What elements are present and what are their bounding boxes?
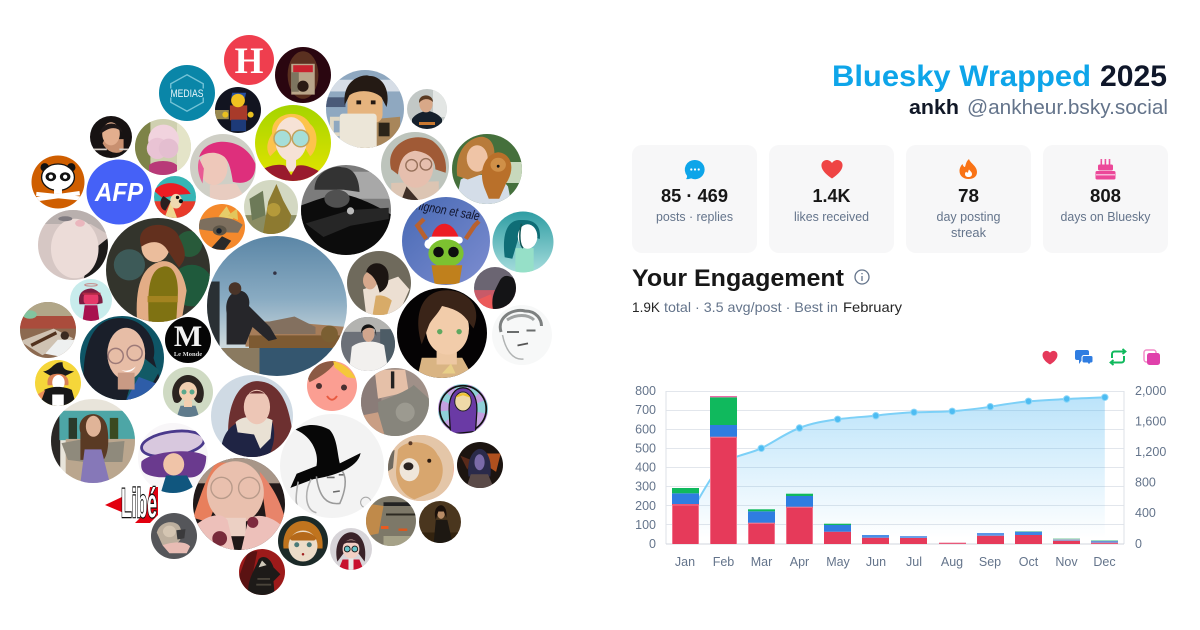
month labels: Mar — [751, 555, 772, 569]
left axis labels: 600 — [635, 422, 656, 436]
avatar: golden dog — [388, 435, 454, 501]
right axis labels: 2,000 — [1135, 384, 1166, 398]
icon: info — [855, 270, 869, 284]
right axis labels: 1,200 — [1135, 445, 1166, 459]
month labels: Jul — [906, 555, 922, 569]
avatar: brown hair illustrated girl — [106, 218, 213, 322]
avatar: orange doll — [278, 516, 328, 566]
stacked bars — [672, 396, 1118, 544]
avatar: teal haired drawing — [492, 212, 554, 276]
avatar: musketeer dog — [154, 176, 196, 218]
engagement summary: total · 3.5 avg/post · Best in — [664, 299, 838, 315]
avatar: Medias logo: MEDIAS — [171, 88, 204, 100]
avatar: lego man with mug — [326, 70, 404, 153]
avatar: library — [20, 302, 76, 358]
avatar: lego figure small — [215, 87, 261, 133]
bar: Nov — [1053, 538, 1080, 544]
grid lines — [666, 391, 1124, 544]
title: Bluesky Wrapped — [832, 60, 1091, 93]
left axis labels: 400 — [635, 460, 656, 474]
avatar: woman dark dress — [419, 501, 461, 543]
panel: avatar bubble cluster: Libé — [121, 480, 157, 526]
engagement summary — [632, 299, 902, 315]
month labels: Apr — [790, 555, 809, 569]
avatar: panda skull logo — [32, 156, 84, 208]
left axis labels: 200 — [635, 499, 656, 513]
right axis labels: 400 — [1135, 506, 1156, 520]
bar: Jun — [862, 535, 889, 544]
bar: Apr — [786, 494, 813, 544]
month labels: May — [826, 555, 851, 569]
bar: Jan — [672, 488, 699, 544]
avatar: pencil sketch boy — [492, 305, 552, 365]
avatar: pink fur woman — [193, 458, 285, 550]
icon: likes legend — [1043, 351, 1057, 364]
avatar: Le Monde logo: Le Monde — [174, 351, 202, 358]
month labels: Feb — [713, 555, 734, 569]
avatar: Le Monde logo: M — [174, 320, 202, 353]
icon: replies legend — [1075, 350, 1093, 365]
bar: May — [824, 524, 851, 544]
bar: Mar — [748, 509, 775, 544]
avatar: winery woman — [51, 399, 135, 483]
month labels: Jun — [866, 555, 886, 569]
avatar: cartoon with green glasses — [163, 367, 213, 417]
avatar: purple hat woman drawing — [138, 423, 208, 493]
value: 808 — [1090, 185, 1121, 206]
icon: reposts legend — [1110, 349, 1126, 365]
avatar: lime cartoon woman — [255, 105, 331, 181]
avatar: H logo — [224, 35, 274, 85]
avatar: pink hair woman — [190, 134, 256, 200]
icon: cake — [1096, 159, 1116, 180]
month labels — [675, 555, 1116, 569]
avatar: smiley cartoon — [307, 361, 357, 411]
chart: monthly engagement — [635, 384, 1166, 569]
avatar: witch pencil drawing — [280, 414, 384, 518]
value: 1.4K — [812, 185, 851, 206]
engagement summary: 1.9K — [632, 299, 661, 315]
avatar: Christmas cactus: mignon et sale — [412, 197, 481, 223]
cumulative line — [685, 394, 1108, 522]
value: 85 · 469 — [661, 185, 728, 206]
month labels: Dec — [1093, 555, 1116, 569]
avatar: dark hair drawing — [90, 116, 132, 158]
month labels: Nov — [1055, 555, 1078, 569]
avatar: Ruby character — [70, 279, 112, 321]
right axis labels: 0 — [1135, 537, 1142, 551]
avatar: cotton candy — [135, 119, 191, 175]
value: 78 — [958, 185, 979, 206]
avatar: Le Monde logo — [165, 317, 211, 363]
right axis labels: 1,600 — [1135, 414, 1166, 428]
month labels: Oct — [1019, 555, 1039, 569]
right axis labels: 800 — [1135, 476, 1156, 490]
avatar: woman updo — [347, 251, 411, 315]
avatar: Christmas cactus — [402, 197, 490, 285]
panel: streak card — [906, 145, 1031, 253]
month labels: Sep — [979, 555, 1001, 569]
avatar: cat — [38, 210, 108, 280]
engagement summary: February — [843, 299, 902, 315]
label: days on Bluesky — [1060, 209, 1151, 224]
avatar: AFP logo: AFP — [94, 177, 144, 207]
heading: Your Engagement: Your Engagement — [632, 265, 844, 292]
left axis labels: 800 — [635, 384, 656, 398]
avatar: dark elf — [457, 442, 503, 488]
panel: days on Bluesky card — [1043, 145, 1168, 253]
avatar: woman with dog — [452, 134, 522, 204]
left axis labels: 300 — [635, 480, 656, 494]
bar: Feb — [710, 396, 737, 544]
avatar: anime girl with glasses — [330, 528, 372, 570]
avatar: sunset tree — [474, 267, 516, 309]
panel: posts and replies card — [632, 145, 757, 253]
user handle: @ankheur.bsky.social — [967, 97, 1168, 119]
left axis labels — [635, 384, 656, 551]
panel: avatar bubble cluster — [20, 35, 554, 595]
left axis labels: 500 — [635, 442, 656, 456]
avatar: hedgehog — [151, 513, 197, 559]
cumulative area — [685, 397, 1105, 544]
avatar: anime man — [397, 288, 487, 378]
avatar: witch hat girl cartoon — [35, 360, 81, 406]
right axis labels — [1135, 384, 1166, 551]
avatar: coyote — [199, 204, 245, 250]
avatar: stained glass purple hood — [438, 384, 488, 434]
avatar: red-haired winter woman — [211, 375, 293, 457]
avatar: H logo: H — [235, 41, 264, 82]
panel: likes card — [769, 145, 894, 253]
avatar: golden painting — [244, 180, 298, 234]
bar: Jul — [900, 536, 927, 544]
avatar: dark warrior on red — [239, 549, 285, 595]
bar: Oct — [1015, 531, 1042, 544]
user handle: ankh — [909, 97, 959, 119]
bar: Dec — [1091, 540, 1118, 544]
avatar: white shirt man — [341, 317, 395, 371]
left axis labels: 0 — [649, 537, 656, 551]
left axis labels: 700 — [635, 403, 656, 417]
avatar: young man — [407, 89, 447, 129]
chart legend icons — [1043, 349, 1160, 365]
month labels: Aug — [941, 555, 963, 569]
avatar: grey knit sweater — [361, 368, 429, 436]
icon: flame — [960, 159, 977, 179]
icon: quotes legend — [1144, 350, 1160, 365]
avatar: AFP logo — [86, 160, 152, 224]
month labels: Jan — [675, 555, 695, 569]
bar: Sep — [977, 533, 1004, 544]
avatar: Medias logo — [159, 65, 215, 121]
label: likes received — [794, 209, 869, 224]
icon: heart — [821, 160, 843, 178]
logo: Libé — [105, 480, 158, 526]
icon: message bubble — [685, 160, 705, 179]
avatar: sky and river big photo — [207, 236, 347, 376]
label: day posting — [936, 209, 1000, 224]
bar: Aug — [939, 543, 966, 544]
left axis labels: 100 — [635, 518, 656, 532]
avatar: smiling curly woman — [80, 316, 164, 400]
title: 2025 — [1100, 60, 1167, 93]
label: streak — [951, 225, 986, 240]
avatar: woman with copper hair — [381, 132, 449, 200]
avatar: maroon mirror — [275, 47, 331, 103]
avatar: black and white portrait — [301, 165, 391, 255]
label: posts · replies — [656, 209, 733, 224]
avatar: machine with cat — [366, 496, 416, 546]
label — [936, 209, 1000, 240]
